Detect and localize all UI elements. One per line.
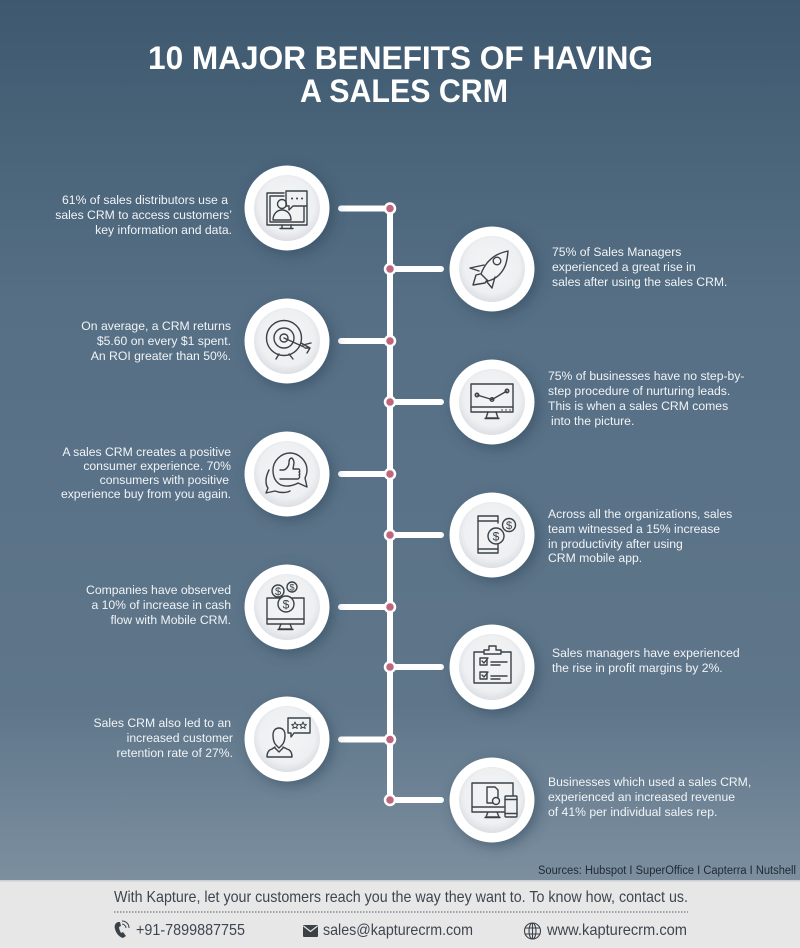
text: benefit 6: team witnessed a 15% increase	[548, 522, 720, 536]
icon: clipboard checklist	[474, 646, 511, 683]
text: benefit 1: 61% of sales distributors use a	[62, 193, 228, 207]
panel: benefit 1	[55, 166, 333, 254]
text: benefit 10: of 41% per individual sales rep.	[548, 805, 717, 819]
icon: monitor with dollar coins	[267, 582, 304, 630]
text: benefit 4: 75% of businesses have no step-by-	[548, 369, 744, 383]
text: benefit 3: $5.60 on every $1 spent.	[97, 334, 231, 348]
panel: benefit 4	[450, 360, 744, 448]
text: benefit 2: sales after using the sales CRM.	[552, 275, 727, 289]
panel: benefit 3	[81, 298, 333, 387]
text: benefit 5: A sales CRM creates a positive	[62, 445, 231, 459]
text: benefit 5: consumers with positive	[100, 473, 229, 487]
text: benefit 8: Sales managers have experienced	[552, 646, 740, 660]
sources note: Sources: Hubspot I SuperOffice I Capterra I Nutshell	[538, 865, 796, 877]
icon: monitor with dollar coins: $	[275, 586, 281, 598]
text: benefit 8: the rise in profit margins by 2%.	[552, 661, 723, 675]
text: benefit 6: CRM mobile app.	[548, 551, 642, 565]
contact: email: sales@kapturecrm.com	[323, 922, 473, 939]
title	[148, 40, 653, 109]
text: benefit 9: Sales CRM also led to an	[93, 716, 231, 730]
icon: video chat monitor	[267, 191, 307, 228]
icon: monitor with dollar coins: $	[289, 582, 295, 592]
text: benefit 2: 75% of Sales Managers	[552, 245, 681, 259]
icon: thumbs up speech bubbles	[266, 453, 307, 493]
text: benefit 6: Across all the organizations, sales	[548, 507, 732, 521]
icon: monitor with dollar coins: $	[283, 598, 290, 612]
timeline connector	[341, 204, 441, 805]
icon: desktop and mobile with document	[472, 783, 517, 818]
panel: benefit 10	[450, 758, 751, 846]
icon: monitor with line chart	[471, 384, 513, 418]
call to action: With Kapture, let your customers reach you the way they want to. To know how, contact us.	[114, 889, 688, 906]
text: benefit 4: step procedure of nurturing leads.	[548, 384, 730, 398]
text: benefit 3: On average, a CRM returns	[81, 319, 231, 333]
text: benefit 5: consumer experience. 70%	[83, 459, 231, 473]
panel: benefit 2	[450, 226, 727, 315]
text: benefit 4: This is when a sales CRM comes	[548, 399, 728, 413]
text: benefit 2: experienced a great rise in	[552, 260, 696, 274]
panel: benefit 6	[450, 492, 732, 581]
footer band	[0, 880, 800, 948]
text: benefit 3: An ROI greater than 50%.	[91, 349, 231, 363]
text: benefit 7: Companies have observed	[86, 583, 231, 597]
icon: mobile with dollar coins: $	[493, 530, 500, 544]
contact: website: www.kapturecrm.com	[546, 922, 687, 939]
contact: phone: +91-7899887755	[136, 922, 245, 939]
text: benefit 9: increased customer	[127, 731, 233, 745]
text: benefit 10: Businesses which used a sales CRM,	[548, 775, 751, 789]
title: A SALES CRM	[300, 73, 508, 109]
text: benefit 9: retention rate of 27%.	[116, 746, 233, 760]
icon: rocket	[470, 251, 508, 288]
text: benefit 1: sales CRM to access customers’	[55, 208, 232, 222]
text: benefit 7: flow with Mobile CRM.	[110, 613, 231, 627]
text: benefit 7: a 10% of increase in cash	[91, 598, 231, 612]
text: benefit 6: in productivity after using	[548, 537, 683, 551]
text: benefit 5: experience buy from you again.	[61, 487, 231, 501]
panel: benefit 7	[86, 564, 333, 653]
panel: benefit 8	[450, 624, 740, 713]
text: benefit 4: into the picture.	[551, 414, 634, 428]
icon: customer with star review bubble	[267, 718, 310, 757]
icon: mobile with dollar coins: $	[506, 520, 512, 532]
text: benefit 1: key information and data.	[95, 223, 232, 237]
icon: mobile with dollar coins	[478, 516, 516, 553]
panel: benefit 5	[61, 432, 333, 520]
icon: target and arrow	[266, 320, 311, 359]
title: 10 MAJOR BENEFITS OF HAVING	[148, 40, 653, 76]
text: benefit 10: experienced an increased revenue	[548, 790, 735, 804]
panel: benefit 9	[93, 696, 333, 785]
